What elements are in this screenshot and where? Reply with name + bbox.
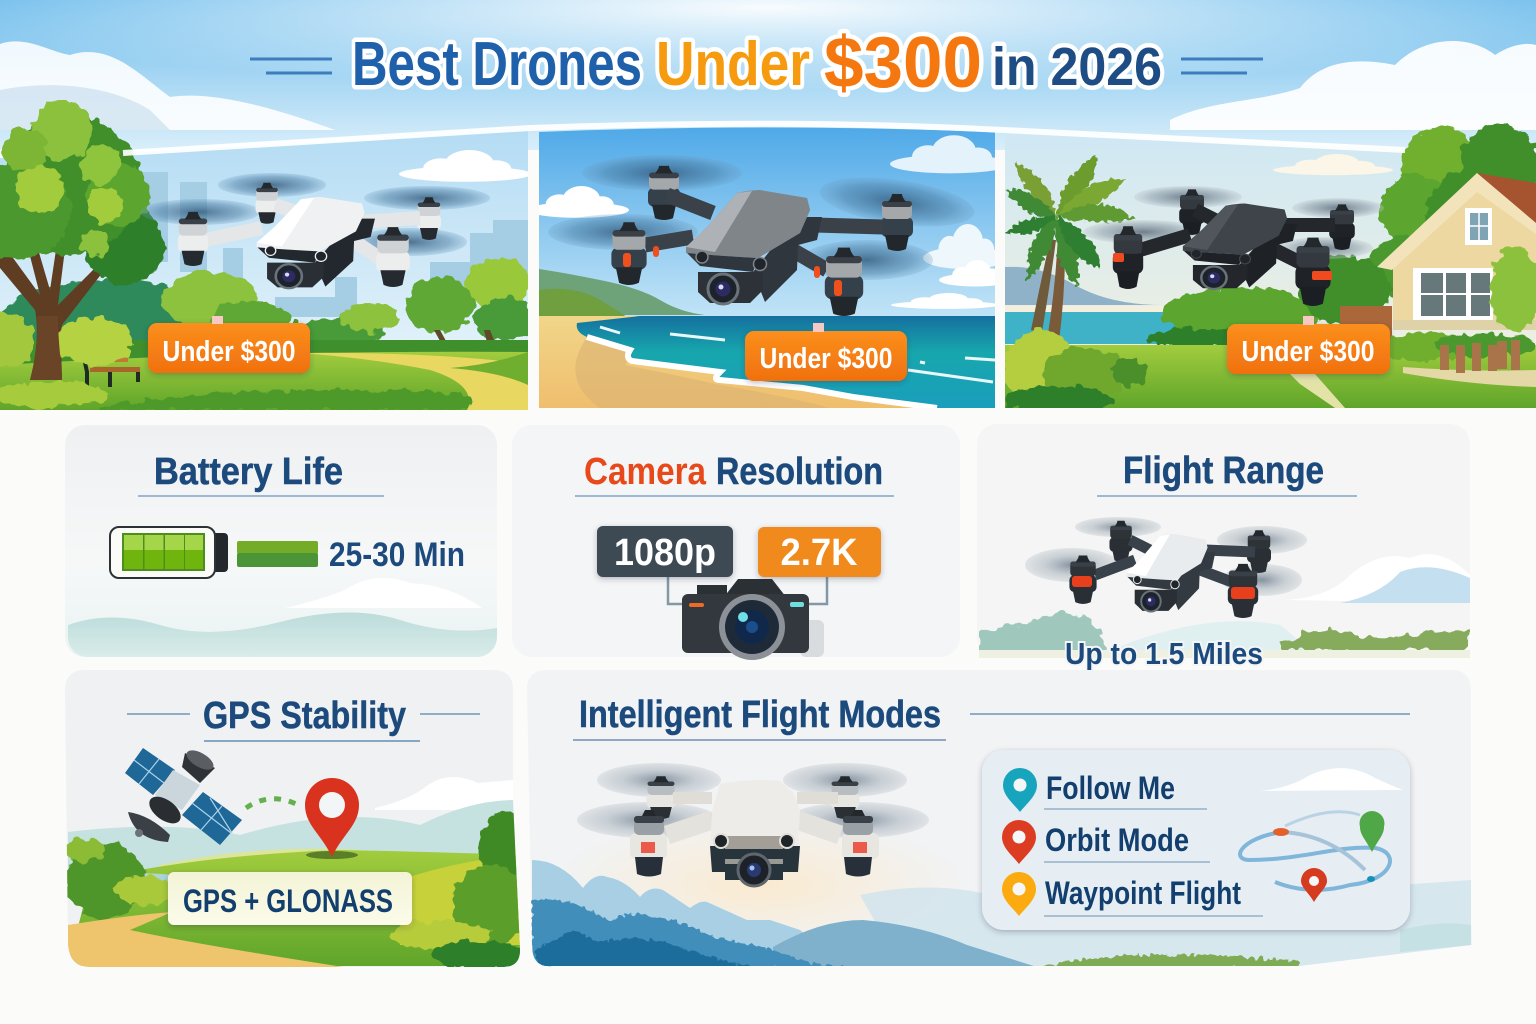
front motors [630, 810, 879, 876]
misty hills [68, 612, 497, 657]
2.7K label [758, 527, 881, 577]
surf foam [587, 337, 937, 408]
battery value: 25-30 Min [329, 536, 465, 574]
distant landscape [979, 613, 1470, 658]
price badge: Under $300 [162, 336, 296, 368]
price badge [1227, 316, 1390, 374]
city skyline [140, 172, 528, 317]
white curved band over scenes [123, 124, 1405, 153]
white front-facing drone [577, 763, 929, 886]
rotors [1025, 517, 1307, 596]
title text: Best Drones [352, 30, 642, 99]
foreground bushes [0, 312, 133, 408]
background trees [2, 257, 528, 340]
panel: beach scene [527, 128, 1011, 408]
follow me [1003, 768, 1207, 812]
beach [539, 316, 937, 408]
title [250, 23, 1263, 103]
dark drone [1083, 186, 1384, 306]
dark drone [548, 155, 977, 316]
header sky with clouds [0, 0, 1536, 150]
body [710, 780, 800, 848]
bench [83, 358, 140, 387]
heading: Camera [584, 451, 707, 493]
1080p label [597, 526, 733, 577]
foreground bushes [1004, 330, 1148, 414]
battery bar [237, 541, 318, 567]
panel: flight range [979, 455, 1470, 670]
flight modes list card [982, 750, 1410, 930]
connector lines [668, 577, 827, 604]
distant mountains [532, 860, 1471, 970]
panel: intelligent flight modes [527, 670, 1472, 970]
title: $300 [824, 23, 982, 103]
satellite icon [125, 746, 242, 845]
large tree [0, 100, 165, 380]
price badge: Under $300 [1242, 336, 1374, 368]
winding path [300, 353, 528, 410]
rear motors [647, 776, 859, 819]
drone [1025, 517, 1307, 618]
cloud [1285, 554, 1470, 603]
white drone [140, 173, 490, 288]
price badge [148, 316, 310, 373]
rotors [1083, 186, 1384, 259]
sea strip [1005, 312, 1185, 344]
follow me: Follow Me [1046, 770, 1175, 806]
panel: park scene [0, 100, 537, 410]
orbit mode [1002, 820, 1210, 864]
heading: Battery Life [154, 451, 343, 493]
heading: Flight Range [1123, 450, 1324, 492]
orbit mode: Orbit Mode [1045, 822, 1189, 858]
shrubs and fence [1383, 248, 1536, 362]
flight path diagram [1240, 811, 1390, 902]
1080p label: 1080p [614, 532, 716, 574]
palm tree [1005, 155, 1135, 342]
GPS + GLONASS label [168, 872, 412, 925]
title: in 2026 [992, 37, 1162, 97]
rotors [577, 763, 929, 838]
panel: camera resolution [512, 425, 960, 660]
hazy peach glow [550, 815, 970, 955]
price badge [745, 323, 907, 381]
rear fence [1340, 306, 1392, 340]
title side rules [250, 59, 1263, 73]
panel: camera resolution: Resolution [716, 451, 883, 493]
lawn [1005, 345, 1536, 408]
waypoint flight [1002, 872, 1263, 916]
rotors [140, 173, 490, 256]
waypoint flight: Waypoint Flight [1045, 875, 1241, 911]
location pin [305, 778, 359, 859]
heading: Intelligent Flight Modes [579, 694, 941, 736]
house [1377, 173, 1536, 330]
signal arc [246, 799, 302, 808]
lawn [22, 340, 528, 364]
rotors [548, 155, 977, 280]
price badge: Under $300 [760, 343, 892, 375]
panel: backyard scene [1004, 125, 1536, 414]
panel: GPS stability [65, 670, 531, 969]
camera icon [682, 579, 824, 660]
panel: battery life [65, 425, 497, 657]
GPS + GLONASS label: GPS + GLONASS [183, 883, 393, 919]
sea [539, 316, 995, 408]
heading: GPS Stability [203, 695, 406, 737]
title: Under [656, 30, 810, 99]
battery icon [110, 527, 228, 578]
background trees [1145, 125, 1536, 347]
2.7K label: 2.7K [780, 532, 858, 574]
distant headland [539, 269, 705, 315]
wooden fence [1440, 340, 1520, 373]
range value: Up to 1.5 Miles [1065, 636, 1263, 671]
distant hill [1005, 267, 1163, 305]
cloud [1260, 768, 1403, 791]
landscape [65, 777, 531, 969]
